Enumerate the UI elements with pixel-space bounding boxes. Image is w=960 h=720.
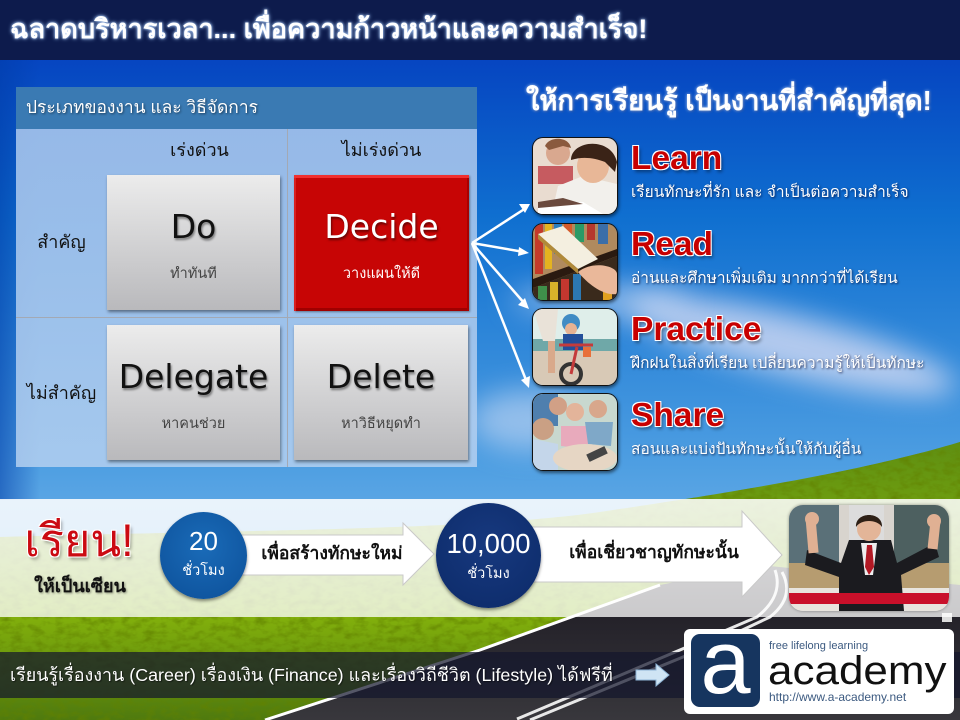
item: read: Read xyxy=(631,226,713,263)
logo wordmark: academy xyxy=(768,649,947,693)
arrow: master skill: เพื่อเชี่ยวชาญทักษะนั้น xyxy=(569,539,739,563)
picture: child on bicycle xyxy=(532,308,618,386)
item: learn: เรียนทักษะที่รัก และ จำเป็นต่อความสำเร็จ xyxy=(631,184,909,201)
card: delete: หาวิธีหยุดทำ xyxy=(341,416,421,432)
card: do: Do xyxy=(171,207,216,246)
card: do: ทำทันที xyxy=(170,266,217,282)
card: delegate xyxy=(107,325,280,460)
item: learn: Learn xyxy=(631,140,722,177)
logo: a-academy xyxy=(684,629,954,714)
icon: footer arrow xyxy=(636,663,670,687)
card: delegate: Delegate xyxy=(119,357,268,396)
item: read xyxy=(631,226,900,287)
row label: not important: ไม่สำคัญ xyxy=(27,383,96,403)
white band xyxy=(0,499,960,617)
item: read: อ่านและศึกษาเพิ่มเติม มากกว่าที่ได้เรียน xyxy=(631,270,898,287)
matrix header: ประเภทของงาน และ วิธีจัดการ xyxy=(26,97,258,117)
arrow: build new skill: เพื่อสร้างทักษะใหม่ xyxy=(261,540,403,563)
picture: successful businessman xyxy=(789,505,949,611)
card: delegate: หาคนช่วย xyxy=(162,416,225,432)
circle: 20 hours: ชั่วโมง xyxy=(182,563,225,579)
circle: 20 hours xyxy=(160,512,247,599)
circle: 20 hours: 20 xyxy=(189,526,218,556)
circle: 10,000 hours: ชั่วโมง xyxy=(467,566,510,582)
footer text: เรียนรู้เรื่องงาน (Career) เรื่องเงิน (Finance) และเรื่องวิถีชีวิต (Lifestyle) ได้ฟรีที่ xyxy=(10,665,613,685)
logo url: http://www.a-academy.net xyxy=(769,690,906,704)
card: do xyxy=(107,175,280,310)
dark footer strip xyxy=(0,652,960,698)
circle: 10,000 hours xyxy=(436,503,541,608)
item: share xyxy=(631,397,864,460)
title bar xyxy=(0,0,960,60)
hill xyxy=(0,442,960,720)
matrix header xyxy=(16,87,477,129)
column label: not urgent: ไม่เร่งด่วน xyxy=(342,140,421,160)
callout: learn like a master xyxy=(24,515,134,596)
card: decide xyxy=(294,175,469,311)
circle: 10,000 hours: 10,000 xyxy=(446,528,531,559)
arrow: build new skill xyxy=(242,522,434,586)
logo tagline: free lifelong learning xyxy=(769,640,868,652)
callout: learn like a master: ให้เป็นเซียน xyxy=(34,576,126,596)
panel: task matrix xyxy=(16,87,477,467)
callout: learn like a master: เรียน! xyxy=(24,515,134,566)
title: ฉลาดบริหารเวลา... เพื่อความก้าวหน้าและความสำเร็จ! xyxy=(10,13,647,44)
card: delete xyxy=(294,325,468,460)
column label: urgent: เร่งด่วน xyxy=(170,140,229,160)
arrows from decide to learning items xyxy=(470,204,530,388)
card: decide: Decide xyxy=(324,207,439,246)
item: practice: Practice xyxy=(631,311,761,348)
card: decide: วางแผนให้ดี xyxy=(343,266,420,282)
card: delete: Delete xyxy=(327,357,435,396)
arrow: master skill xyxy=(532,510,782,596)
item: practice xyxy=(630,311,926,374)
heading: learning is most important: ให้การเรียนรู้ เป็นงานที่สำคัญที่สุด! xyxy=(526,85,932,116)
picture: group sharing xyxy=(532,393,618,471)
item: share: สอนและแบ่งปันทักษะนั้นให้กับผู้อื่น xyxy=(631,441,861,458)
item: learn xyxy=(631,140,910,201)
item: share: Share xyxy=(631,397,724,434)
picture: boy reading xyxy=(532,137,618,215)
picture: bookshelf xyxy=(532,223,618,301)
road xyxy=(265,565,960,720)
row label: important: สำคัญ xyxy=(37,232,86,252)
item: practice: ฝึกฝนในสิ่งที่เรียน เปลี่ยนความรู้ให้เป็นทักษะ xyxy=(631,355,924,372)
